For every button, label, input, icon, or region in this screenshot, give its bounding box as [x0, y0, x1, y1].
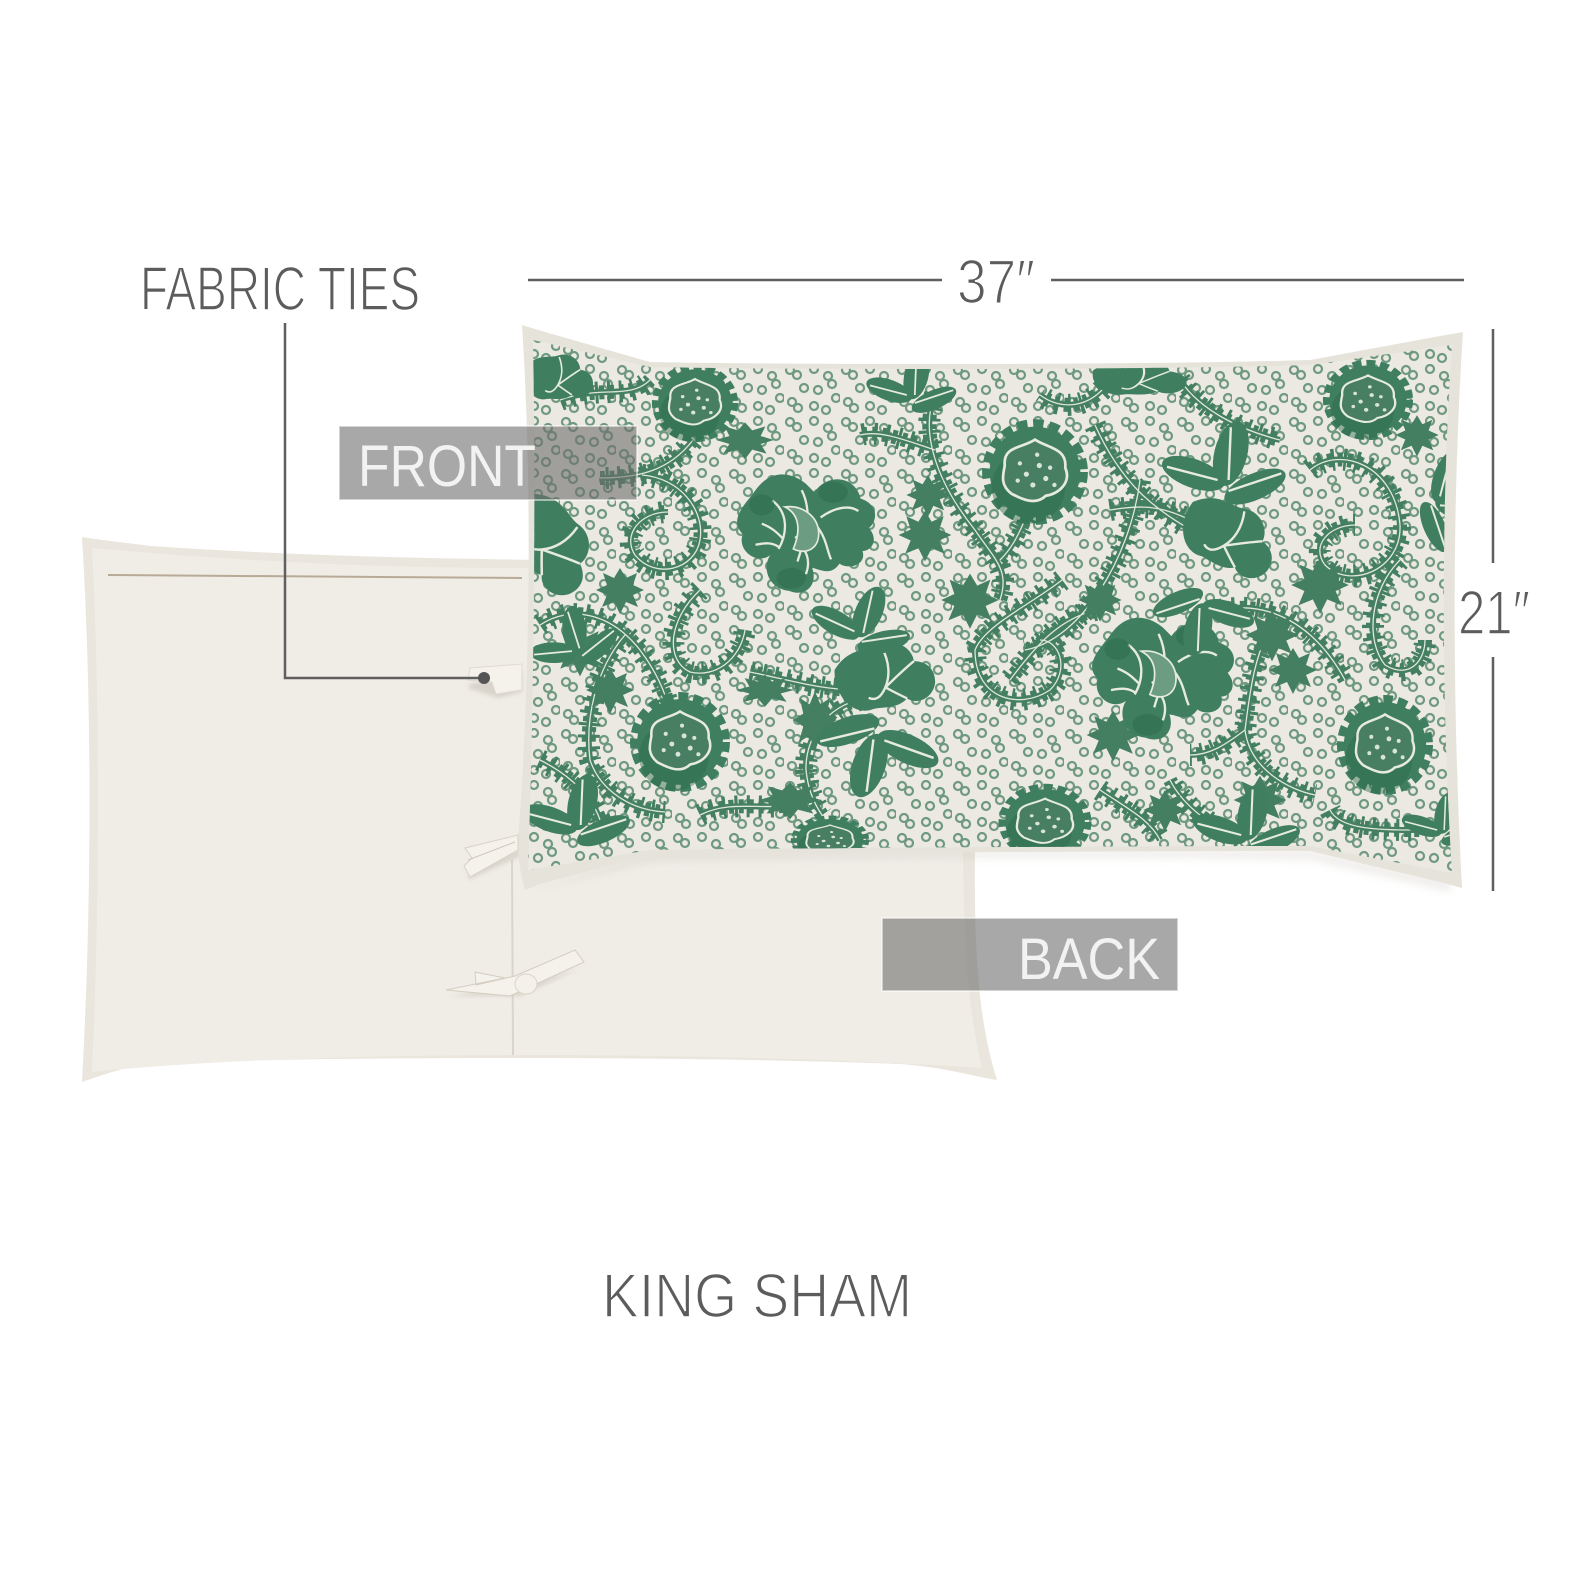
middle fabric tie: [464, 835, 522, 880]
front label: FRONT: [358, 434, 536, 499]
front pillow: [495, 325, 1491, 890]
back label: [882, 918, 1178, 992]
round flowers: [637, 366, 1426, 864]
product name caption: KING SHAM: [602, 1262, 912, 1331]
tulip flowers: [495, 354, 1289, 714]
floral print: [528, 340, 1452, 871]
leaf sprays: [530, 369, 1450, 846]
back label: BACK: [1018, 927, 1160, 992]
infographic canvas: [82, 260, 1528, 1317]
back pillow: [82, 537, 997, 1082]
closure seam: [512, 860, 513, 1055]
fabric ties label: FABRIC TIES: [140, 255, 420, 324]
height dimension: 21″: [1458, 579, 1530, 648]
front label: [339, 426, 637, 500]
large peony flowers: [737, 474, 1234, 740]
front pillow flange: [518, 325, 1463, 890]
thorny vines: [540, 380, 1425, 840]
front pillow shadow: [528, 850, 1450, 892]
width dimension: 37″: [957, 248, 1035, 317]
fabric ties leader line: [285, 323, 490, 684]
top fabric tie: [468, 664, 522, 698]
back flap seam: [108, 575, 522, 578]
back pillow body: [92, 548, 982, 1072]
bottom fabric tie: [446, 950, 584, 996]
thorny leaf clusters: [554, 415, 1439, 832]
